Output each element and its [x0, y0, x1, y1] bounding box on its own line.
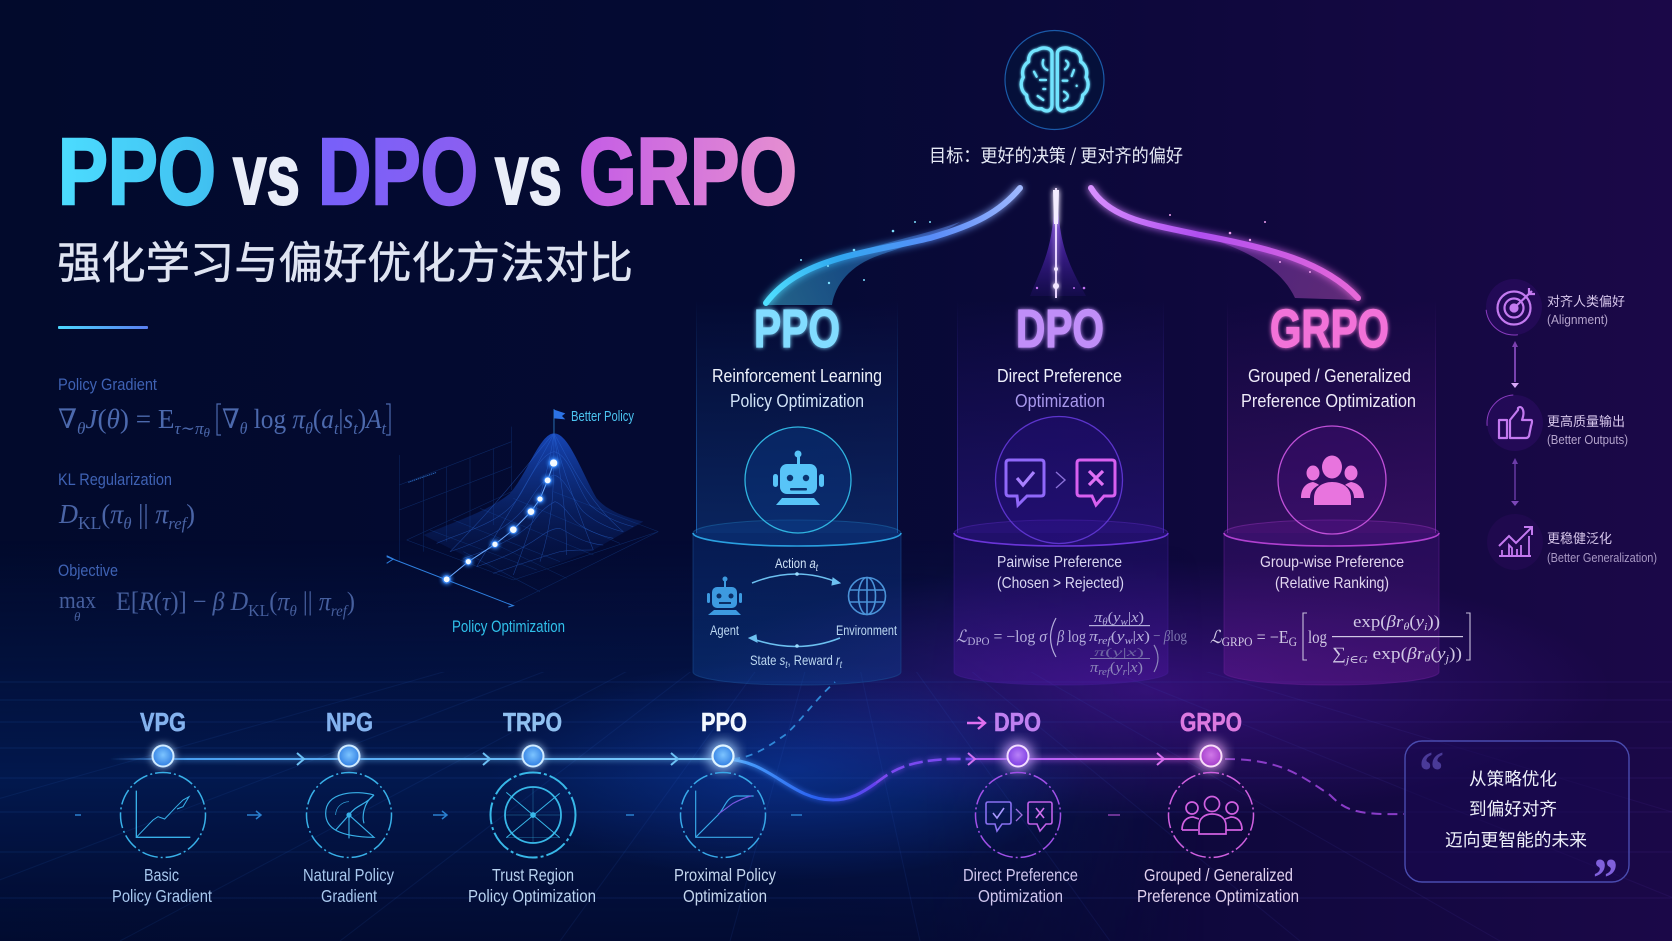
formula: policy gradient: ∇	[58, 404, 77, 434]
formula: GRPO loss: j∈G	[1344, 654, 1368, 666]
text: better generalization	[1547, 528, 1657, 565]
formula: DPO loss: w	[1125, 636, 1133, 647]
stream: goal to PPO	[765, 188, 1020, 305]
formula: policy gradient: A	[364, 404, 382, 434]
formula: GRPO loss: θ	[1403, 621, 1410, 633]
formula: DPO loss: ℒ	[956, 627, 968, 646]
panel: PPO	[693, 299, 901, 685]
timeline stage: TRPO	[468, 707, 596, 906]
heading: GRPO: GRPO	[1270, 299, 1389, 359]
formula: policy gradient: a	[321, 404, 334, 434]
label: pairwise preference	[997, 554, 1124, 592]
callout: quote: 从策略优化	[1469, 769, 1557, 789]
formula: objective: KL	[248, 601, 269, 620]
formula: objective: E[R(τ)] − β D	[116, 587, 251, 616]
text: better outputs	[1547, 411, 1628, 447]
diagram: agent-environment loop	[707, 555, 897, 671]
formula: DPO loss: w	[1121, 617, 1128, 628]
formula: KL regularization: θ	[123, 514, 132, 533]
stream: goal to GRPO	[1091, 188, 1358, 300]
formula: DPO loss: β log	[1056, 627, 1086, 646]
formula: policy gradient: Policy Gradient	[58, 375, 157, 394]
timeline stage: GRPO: Preference Optimization	[1137, 886, 1299, 906]
icon: preference comparison	[996, 416, 1122, 544]
formula: DPO loss: (	[1108, 610, 1113, 626]
formula: GRPO loss	[1210, 612, 1470, 666]
label: group-wise preference	[1260, 554, 1404, 592]
timeline stage: NPG: Gradient	[321, 886, 377, 906]
goal: brain icon	[1005, 30, 1104, 130]
formula: GRPO loss: exp(	[1368, 644, 1407, 663]
timeline stage: DPO	[963, 707, 1078, 906]
formula: policy gradient: t	[334, 419, 340, 438]
diagram: agent-environment loop: State s	[750, 652, 787, 668]
formula: DPO loss: x)	[1130, 660, 1143, 676]
formula: DPO loss: (	[1110, 660, 1115, 676]
timeline stage: VPG	[112, 707, 212, 906]
label: group-wise preference: Group-wise Preference	[1260, 554, 1404, 571]
timeline stage: NPG: NPG	[326, 707, 373, 737]
formula: policy gradient: )	[358, 404, 366, 434]
formula: objective: max	[59, 588, 96, 614]
title: vs	[495, 127, 562, 223]
formula: policy gradient: t	[382, 419, 387, 438]
formula: policy gradient: π	[292, 404, 306, 434]
formula: GRPO loss: ))	[1449, 644, 1462, 663]
formula: GRPO loss: ∑	[1332, 644, 1344, 663]
timeline stage: VPG: Basic	[144, 865, 179, 885]
timeline stage: PPO	[674, 707, 776, 906]
diagram: agent-environment loop: Action a	[775, 555, 817, 571]
formula: DPO loss: |	[1128, 610, 1131, 626]
title: GRPO	[579, 119, 797, 225]
formula: objective: π	[277, 587, 290, 616]
formula: DPO loss: ref	[1098, 636, 1112, 647]
formula: DPO loss: π	[1089, 629, 1099, 645]
formula: objective: π	[319, 587, 332, 616]
formula: DPO loss: DPO	[967, 634, 990, 648]
timeline stage: DPO: DPO	[994, 707, 1041, 737]
description: GRPO: Preference Optimization	[1241, 391, 1416, 411]
formula: GRPO loss: exp(βr	[1353, 612, 1402, 631]
formula: policy gradient: θ	[305, 419, 313, 438]
panel: GRPO	[1210, 299, 1470, 685]
formula: GRPO loss: GRPO	[1222, 634, 1253, 649]
formula: KL regularization: ref	[168, 514, 188, 533]
icon: group of people	[1278, 426, 1386, 534]
formula: DPO loss: = −log	[990, 627, 1039, 646]
chart: 3D policy optimization surface: Better Policy	[571, 408, 634, 425]
formula: policy gradient: (θ) = E	[97, 404, 174, 434]
chart: 3D policy optimization surface: Policy Optimization	[452, 617, 565, 636]
text: alignment	[1547, 291, 1625, 327]
timeline stage: TRPO: Trust Region	[492, 865, 574, 885]
formula: policy gradient: θ	[240, 419, 247, 438]
timeline stage: NPG	[303, 707, 394, 906]
description: PPO: Policy Optimization	[730, 391, 864, 411]
formula: GRPO loss: βr	[1406, 644, 1425, 663]
formula: GRPO loss: ℒ	[1210, 627, 1223, 647]
callout: quote: 迈向更智能的未来	[1445, 830, 1587, 850]
formula: objective: ||	[297, 587, 319, 616]
formula: policy gradient: J	[85, 404, 100, 434]
arrow: outputs to generalization	[1511, 458, 1519, 506]
formula: KL regularization: D	[58, 499, 78, 529]
formula: objective: θ	[290, 603, 297, 620]
timeline stage: GRPO: Grouped / Generalized	[1144, 865, 1293, 885]
title: DPO	[318, 119, 478, 225]
diagram: agent-environment loop: t	[840, 660, 843, 671]
icon: globe	[848, 578, 886, 614]
formula: KL regularization: KL Regularization	[58, 470, 172, 489]
formula: objective	[58, 561, 355, 624]
arrow: alignment to outputs	[1511, 341, 1519, 388]
formula: DPO loss: (	[1111, 629, 1117, 645]
description: PPO: Reinforcement Learning	[712, 366, 882, 386]
formula: policy gradient: t	[353, 419, 359, 438]
title: PPO	[58, 119, 216, 225]
formula: KL regularization: KL	[78, 513, 101, 533]
timeline stage: PPO: Optimization	[683, 886, 767, 906]
goal label: 目标：更好的决策 / 更对齐的偏好	[929, 142, 1183, 168]
formula: DPO loss: π	[1090, 660, 1099, 676]
formula: GRPO loss: = −E	[1253, 627, 1289, 647]
formula: policy gradient: θ	[204, 425, 211, 440]
formula: objective: Objective	[58, 561, 118, 580]
timeline stage: TRPO: Policy Optimization	[468, 886, 596, 906]
timeline stage: GRPO: GRPO	[1180, 707, 1242, 737]
label: pairwise preference: Pairwise Preference	[997, 554, 1122, 571]
text: alignment: 对齐人类偏好	[1547, 291, 1625, 310]
diagram: agent-environment loop: r	[836, 652, 841, 668]
timeline stage: DPO: Optimization	[978, 886, 1063, 906]
formula: policy gradient: ∇	[222, 404, 241, 434]
callout: quote: 到偏好对齐	[1469, 799, 1557, 819]
formula: policy gradient: |	[338, 404, 343, 434]
formula: GRPO loss: (	[1409, 612, 1416, 631]
formula: DPO loss: π	[1094, 610, 1103, 626]
description: DPO: Optimization	[1015, 391, 1105, 411]
formula: policy gradient: τ∼π	[175, 419, 211, 440]
heading: PPO: PPO	[754, 299, 840, 359]
formula: KL regularization	[58, 470, 195, 533]
formula: GRPO loss: i	[1424, 621, 1427, 633]
icon: thumbs up	[1487, 395, 1543, 451]
formula: DPO loss	[956, 610, 1187, 678]
formula: objective: θ	[74, 609, 81, 624]
timeline stage: DPO: Direct Preference	[963, 865, 1078, 885]
formula: DPO loss: y	[1114, 629, 1125, 645]
diagram: agent-environment loop: Environment	[836, 623, 897, 638]
formula: GRPO loss: ))	[1427, 612, 1440, 631]
formula: KL regularization: π	[110, 499, 125, 529]
formula: DPO loss: x)	[1131, 610, 1144, 626]
panel: DPO	[954, 299, 1187, 685]
formula: DPO loss: x)	[1136, 629, 1149, 645]
formula: policy gradient: (	[313, 404, 321, 434]
formula: KL regularization: ||	[132, 499, 155, 529]
title: vs	[233, 127, 300, 223]
formula: GRPO loss: j	[1443, 653, 1449, 665]
icon: robot	[745, 427, 851, 533]
formula: DPO loss: y	[1111, 610, 1121, 626]
text: alignment: (Alignment)	[1547, 312, 1608, 327]
diagram: agent-environment loop: t	[785, 660, 788, 671]
description: GRPO: Grouped / Generalized	[1248, 366, 1411, 386]
formula: KL regularization: (	[101, 499, 110, 529]
timeline stage: GRPO	[1137, 707, 1299, 906]
subtitle: 强化学习与偏好优化方法对比	[57, 227, 633, 291]
formula: KL regularization: π	[155, 499, 170, 529]
formula: GRPO loss: θ	[1424, 653, 1431, 665]
diagram: agent-environment loop: , Reward	[788, 652, 836, 668]
text: better outputs: (Better Outputs)	[1547, 432, 1628, 447]
timeline stage: PPO: PPO	[701, 707, 747, 737]
formula: DPO loss: θ	[1102, 617, 1108, 628]
callout: quote: ”	[1593, 848, 1618, 910]
diagram: agent-environment loop: t	[816, 563, 819, 574]
formula: DPO loss: |	[1133, 629, 1136, 645]
formula: GRPO loss: log	[1308, 627, 1327, 647]
benefits list	[1486, 279, 1657, 570]
formula: DPO loss: |	[1127, 660, 1130, 676]
formula: policy gradient	[58, 375, 390, 440]
accent rule	[58, 326, 148, 329]
formula: GRPO loss: G	[1289, 634, 1297, 649]
icon: small agent	[707, 576, 742, 615]
formula: objective: )	[347, 587, 355, 616]
label: pairwise preference: (Chosen > Rejected)	[997, 575, 1124, 592]
description: PPO	[712, 366, 882, 411]
timeline stage: VPG: VPG	[140, 707, 186, 737]
text: better outputs: 更高质量输出	[1547, 411, 1625, 430]
heading: DPO: DPO	[1016, 299, 1104, 359]
icon: growth chart	[1487, 514, 1543, 570]
formula: DPO loss: r	[1123, 667, 1127, 678]
formula: objective: ref	[331, 603, 349, 620]
callout: quote: “	[1419, 741, 1444, 803]
timeline stage: TRPO: TRPO	[503, 707, 562, 737]
formula: DPO loss: − βlog	[1153, 628, 1187, 645]
formula: policy gradient: log	[247, 404, 292, 434]
description: DPO: Direct Preference	[997, 366, 1122, 386]
timeline stage: NPG: Natural Policy	[303, 865, 394, 885]
formula: KL regularization: )	[186, 499, 195, 529]
description: GRPO	[1241, 366, 1416, 411]
formula: GRPO loss: y	[1413, 612, 1425, 631]
label: group-wise preference: (Relative Ranking)	[1275, 575, 1389, 592]
formula: policy gradient: s	[343, 404, 353, 434]
diagram: agent-environment loop: Agent	[710, 623, 739, 638]
formula: DPO loss: π ( y |x )	[1094, 645, 1144, 659]
icon: target	[1486, 279, 1542, 335]
callout: quote	[1405, 741, 1629, 910]
timeline line	[75, 682, 1404, 819]
timeline stage: PPO: Proximal Policy	[674, 865, 776, 885]
stream: goal to DPO	[1030, 188, 1086, 298]
chart: 3D policy optimization surface	[387, 408, 658, 636]
timeline stage: VPG: Policy Gradient	[112, 886, 212, 906]
formula: DPO loss: y	[1113, 660, 1123, 676]
text: better generalization: 更稳健泛化	[1547, 528, 1612, 547]
formula: GRPO loss: (	[1430, 644, 1437, 663]
formula: GRPO loss: y	[1435, 644, 1446, 663]
formula: objective: (	[269, 587, 277, 616]
formula: policy gradient: θ	[77, 419, 85, 438]
description: DPO	[997, 366, 1122, 411]
formula: DPO loss: ref	[1098, 667, 1111, 678]
title	[58, 119, 797, 225]
formula: DPO loss: σ	[1039, 627, 1048, 646]
